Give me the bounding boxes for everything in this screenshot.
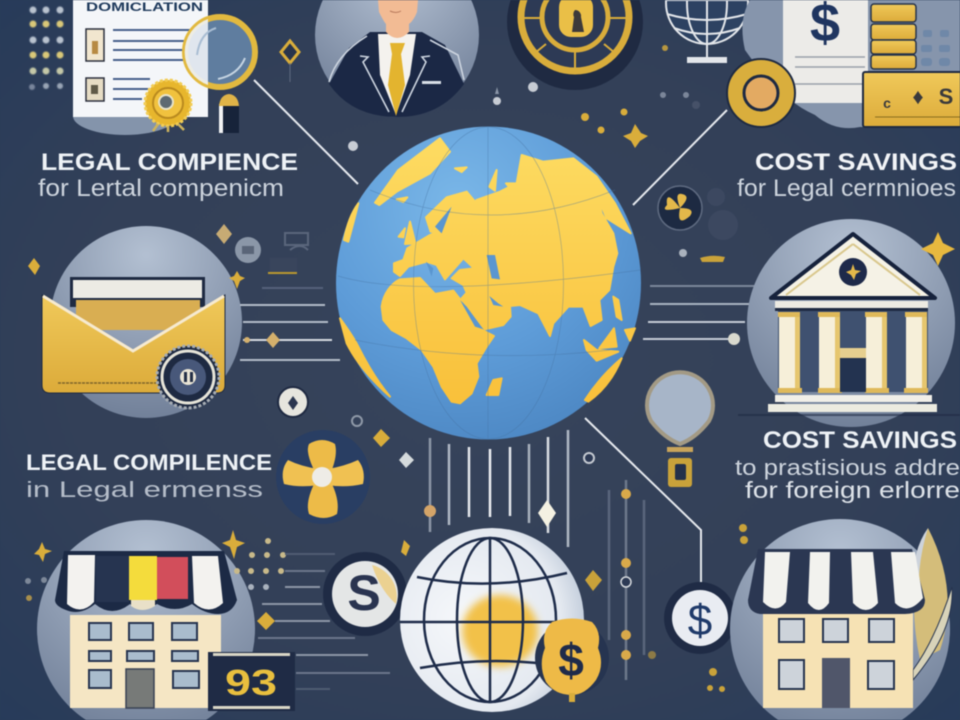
icon: wireframe globe on stand	[666, 0, 748, 63]
icon: dollar coin left: S	[347, 565, 381, 621]
icon: magnifier lower right of globe	[647, 372, 713, 487]
text: legal subheading lower: in Legal ermenss	[26, 477, 263, 502]
windows	[779, 619, 894, 689]
inland seas	[426, 207, 503, 329]
necktie	[388, 43, 405, 116]
panel: storefront left	[37, 520, 255, 720]
icon: dollar coin left	[323, 552, 407, 636]
star and specks near globe top	[348, 45, 700, 151]
icon: gold dollar coin	[535, 618, 609, 702]
data lines: lower left	[258, 554, 390, 689]
central globe	[336, 126, 641, 440]
text: legal subheading top: for Lertal compenicm	[38, 175, 284, 202]
icon: gold ring coin	[727, 59, 795, 127]
icon: dollar coin right	[664, 582, 736, 654]
building	[763, 610, 913, 708]
icon: gold cross coin	[276, 430, 370, 524]
panel: cost savings icon with paper and coins: c	[883, 95, 891, 111]
head and neck	[378, 0, 418, 38]
globe wires	[400, 538, 567, 703]
Americas edge and Australia	[340, 203, 622, 402]
panel: cost savings icon with paper and coins	[742, 0, 960, 128]
connector line: document to globe	[254, 80, 358, 184]
heading: legal compliance top: LEGAL COMPIENCE	[41, 149, 298, 176]
panel: domiciliation document with seal and magnifier	[73, 0, 255, 135]
Africa	[382, 278, 494, 403]
Madagascar and Southeast Asia	[487, 297, 635, 395]
heading: cost savings lower: COST SAVINGS	[763, 427, 957, 454]
bank steps	[775, 395, 932, 402]
text: prestigious address: to prastisious addre	[735, 455, 960, 480]
leaves	[912, 528, 952, 680]
gold seal	[145, 80, 191, 132]
lapels	[329, 36, 464, 112]
connector line: globe to dollar coin	[585, 418, 701, 582]
specks and diamond by gold coin	[585, 524, 748, 692]
icon: wire globe bottom center	[400, 528, 584, 712]
envelope	[42, 295, 225, 393]
document sheet	[73, 0, 208, 117]
icon: dark clover coin, upper right	[658, 186, 738, 262]
bank roof	[771, 234, 935, 298]
gold box	[863, 72, 960, 127]
windows	[89, 623, 199, 688]
heading: cost savings top: COST SAVINGS	[755, 149, 957, 176]
heading: legal compliance lower: LEGAL COMPILENCE	[26, 450, 272, 475]
data lines: middle right	[643, 286, 755, 345]
panel: bank building	[738, 219, 960, 427]
suit	[329, 32, 464, 117]
panel: envelope with seal	[42, 226, 242, 418]
awning	[55, 551, 237, 614]
small marker dots mid-left	[278, 387, 594, 468]
panel: businessman portrait	[315, 0, 479, 117]
panel: cost savings icon with paper and coins: ♦	[912, 84, 924, 109]
icon: dollar coin right: $	[688, 596, 712, 645]
decoration: left side star and dots	[25, 530, 410, 630]
awning	[748, 549, 925, 614]
diamond marker	[281, 41, 299, 82]
Eurasia	[394, 155, 631, 336]
panel: storefront right	[730, 519, 952, 720]
coin stack	[871, 4, 916, 69]
panel: cost savings icon with paper and coins: S	[939, 84, 953, 109]
text: cost savings subheading top: for Legal cermnioes	[737, 175, 956, 202]
vertical timeline bars below globe	[424, 430, 644, 680]
rosette seal	[157, 346, 219, 408]
Scandinavia	[426, 192, 475, 233]
connector line: cost savings to globe	[633, 110, 727, 205]
data lines: middle left	[240, 288, 340, 360]
Britain and islands	[397, 167, 517, 244]
icon: gold dollar coin: $	[558, 634, 584, 686]
small indicators near top right of coin stack	[921, 30, 950, 66]
document thumbnails and text lines	[86, 29, 190, 101]
icons: small items above envelope	[28, 224, 308, 289]
letter inside envelope	[70, 277, 205, 330]
shirt	[378, 34, 416, 115]
decorative dot grid: top left	[29, 6, 64, 90]
Greenland	[375, 138, 450, 205]
star beside bank	[921, 232, 955, 266]
graticule lines	[338, 127, 640, 439]
building	[70, 615, 221, 708]
magnifier	[185, 17, 255, 133]
bank columns	[775, 301, 928, 393]
icon: gold lock coin	[507, 0, 643, 90]
continents	[340, 138, 635, 403]
document title: DOMICLATION	[86, 0, 203, 14]
mouth	[390, 11, 401, 12]
sign: number plate	[208, 652, 295, 711]
sign: number plate: 93	[225, 662, 277, 703]
paper with dollar sign	[783, 0, 868, 103]
text: foreign enterprises: for foreign erlorre	[745, 477, 960, 503]
